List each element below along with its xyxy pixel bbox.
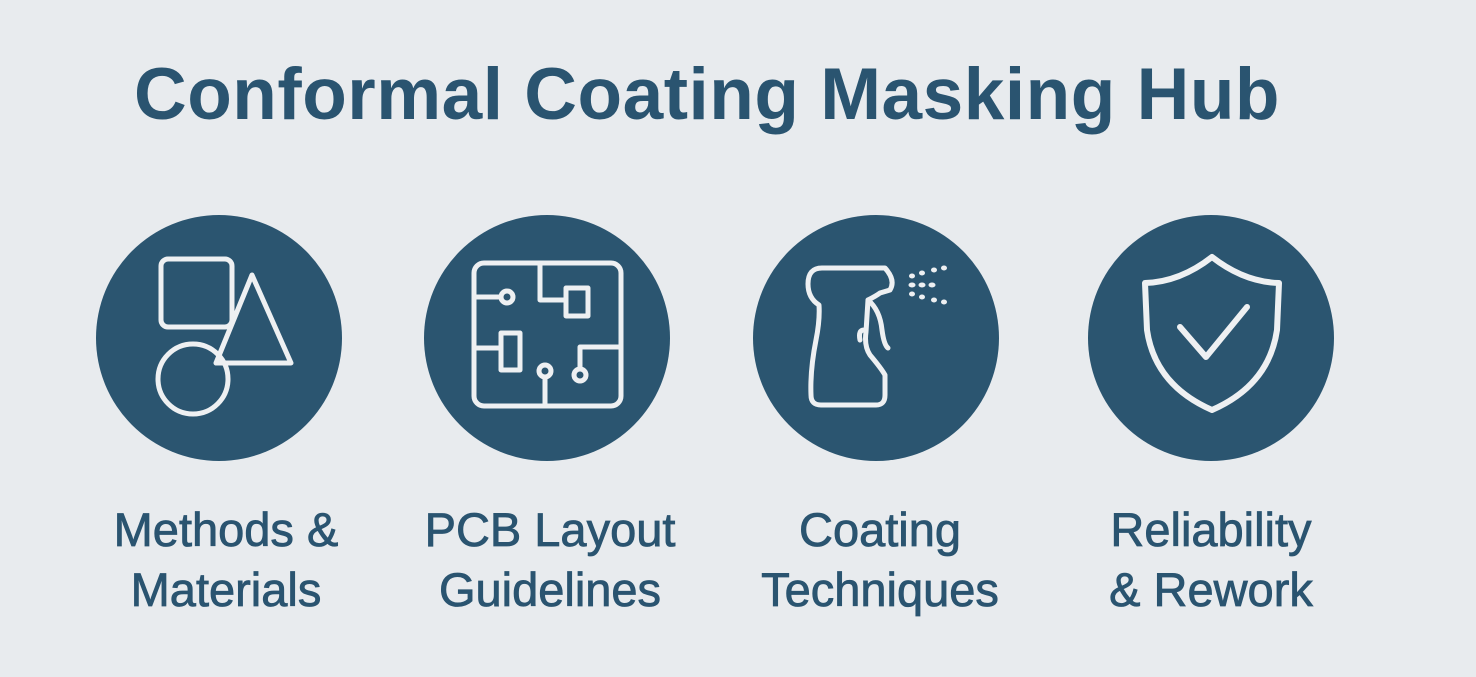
icon: methods shapes — [96, 215, 342, 461]
icon: shield check — [1088, 215, 1334, 461]
label: coating — [761, 503, 999, 616]
label: reliability: Reliability — [1110, 503, 1312, 556]
label: pcb: PCB Layout — [425, 503, 675, 556]
label: reliability: & Rework — [1109, 563, 1313, 616]
label: methods: Materials — [131, 563, 321, 616]
icon: pcb layout — [424, 215, 670, 461]
label: coating: Coating — [799, 503, 961, 556]
label: coating: Techniques — [761, 563, 999, 616]
label: pcb — [425, 503, 676, 616]
label: reliability — [1109, 503, 1314, 616]
label: methods: Methods & — [114, 503, 338, 556]
label: methods — [114, 503, 338, 616]
label: pcb: Guidelines — [439, 563, 661, 616]
icon: spray bottle — [753, 215, 999, 461]
title: Conformal Coating Masking Hub — [134, 54, 1280, 135]
